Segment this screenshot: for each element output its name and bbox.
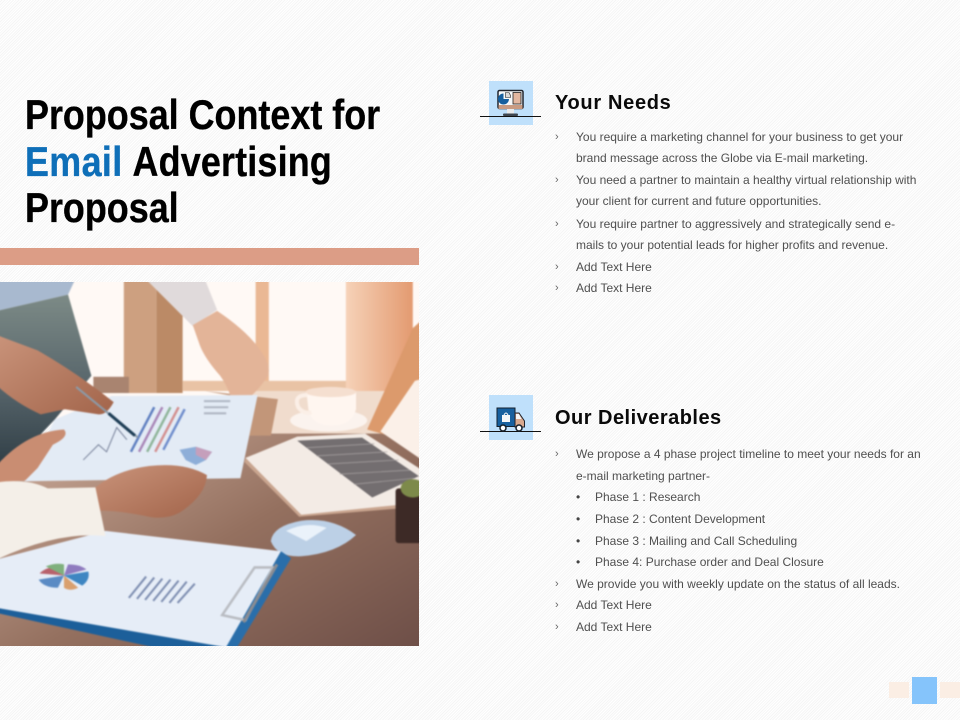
chart sheet held in the air [24,395,258,481]
list: your needs: › [555,282,559,294]
list: our deliverables: • [576,512,580,526]
list: our deliverables: › [555,599,559,611]
icon: monitor with charts [480,81,541,125]
table [0,399,422,649]
list: our deliverables: › [555,621,559,633]
list: our deliverables: e-mail marketing partner- [576,469,710,483]
list: our deliverables: We propose a 4 phase project timeline to meet your needs for an [576,447,921,461]
standing person torso [0,279,91,465]
icon: delivery truck [480,395,541,440]
heading: your needs: Your Needs [555,92,671,114]
list: your needs: brand message across the Globe via E-mail marketing. [576,151,868,165]
list: our deliverables: Phase 3 : Mailing and Call Scheduling [595,534,797,548]
second person sleeve and hand above [146,279,269,404]
list: our deliverables: Phase 1 : Research [595,490,700,504]
pie chart [39,564,89,590]
list: our deliverables: Phase 2 : Content Development [595,512,765,526]
left hand holding sheet [0,430,66,482]
list: your needs: › [555,131,559,143]
list: our deliverables: We provide you with weekly update on the status of all leads. [576,577,900,591]
front hand holding sheet [95,465,207,518]
list: our deliverables: Add Text Here [576,620,652,634]
coffee cup [290,387,367,432]
list: your needs [555,130,916,295]
clipboard report [0,531,291,649]
plant pot [396,479,425,543]
list: your needs: mails to your potential leads for higher profits and revenue. [576,238,888,252]
window background [0,279,422,421]
list: your needs: your client for current and future opportunities. [576,194,821,208]
list: your needs: You require partner to aggressively and strategically send e- [576,217,895,231]
list: your needs: › [555,218,559,230]
salmon divider band [0,248,419,265]
title [25,91,380,231]
books [205,391,278,436]
list: our deliverables: Phase 4: Purchase order and Deal Closure [595,555,824,569]
white sleeve [0,481,106,559]
list: our deliverables: Add Text Here [576,598,652,612]
window frames [93,279,413,396]
list: your needs: Add Text Here [576,260,652,274]
list: your needs: You need a partner to maintain a healthy virtual relationship with [576,173,916,187]
list: our deliverables: › [555,578,559,590]
photo: team reviewing charts at a desk [0,282,419,646]
heading: our deliverables: Our Deliverables [555,407,722,429]
clip [222,564,277,622]
pointing hand and pen [0,335,138,438]
list: our deliverables: • [576,555,580,569]
list: your needs: Add Text Here [576,281,652,295]
title: Proposal Context for [25,91,380,138]
laptop [244,434,422,517]
page marker squares [889,677,960,704]
title: Email Advertising [25,138,332,184]
list: your needs: › [555,174,559,186]
list: your needs: You require a marketing channel for your business to get your [576,130,903,144]
list: our deliverables: • [576,534,580,548]
title: Proposal [25,184,179,231]
mouse [271,520,356,556]
list: our deliverables: › [555,448,559,460]
list: our deliverables [555,447,921,634]
list: our deliverables: • [576,490,580,504]
picture frame on right [367,320,422,460]
list: your needs: › [555,261,559,273]
